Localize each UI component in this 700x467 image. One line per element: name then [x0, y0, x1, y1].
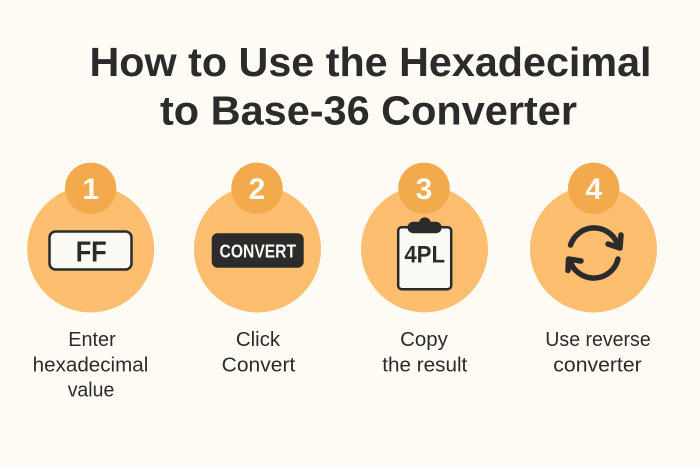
icon: FF input box: FF: [76, 237, 107, 269]
badge: number 3: 3: [416, 173, 432, 206]
label: step 1 text: Enter: [68, 328, 116, 351]
label: step 4 text: [545, 328, 651, 377]
label: step 1 text: value: [68, 379, 114, 402]
badge: number 4: [568, 163, 619, 214]
icon: convert button: CONVERT: [220, 241, 296, 261]
badge: number 2: [231, 163, 283, 214]
panel: step 3: [361, 163, 488, 377]
title: [90, 39, 652, 134]
title: to Base-36 Converter: [160, 88, 577, 134]
label: step 3 text: the result: [382, 354, 468, 377]
badge: number 1: 1: [82, 173, 99, 206]
label: step 4 text: converter: [553, 354, 642, 377]
badge: number 3: [398, 163, 450, 214]
icon: reverse arrows: [568, 228, 621, 278]
panel: step 2: [194, 163, 321, 377]
label: step 3 text: Copy: [400, 328, 449, 351]
icon: convert button: [212, 233, 304, 268]
panel: step 4: [530, 163, 657, 377]
label: step 1 text: [33, 328, 148, 402]
label: step 3 text: [382, 328, 468, 377]
badge: number 1: [65, 163, 116, 214]
icon: FF input box: [50, 232, 132, 270]
icon: clipboard with result: 4PL: [404, 241, 445, 268]
title: How to Use the Hexadecimal: [90, 39, 652, 85]
label: step 2 text: [222, 328, 296, 377]
label: step 4 text: Use reverse: [545, 328, 651, 351]
label: step 2 text: Click: [236, 328, 281, 351]
label: step 2 text: Convert: [222, 354, 296, 377]
badge: number 2: 2: [249, 173, 265, 206]
badge: number 4: 4: [585, 173, 602, 206]
icon: clipboard with result: [398, 217, 451, 289]
panel: step 1: [27, 163, 154, 402]
label: step 1 text: hexadecimal: [33, 354, 148, 377]
